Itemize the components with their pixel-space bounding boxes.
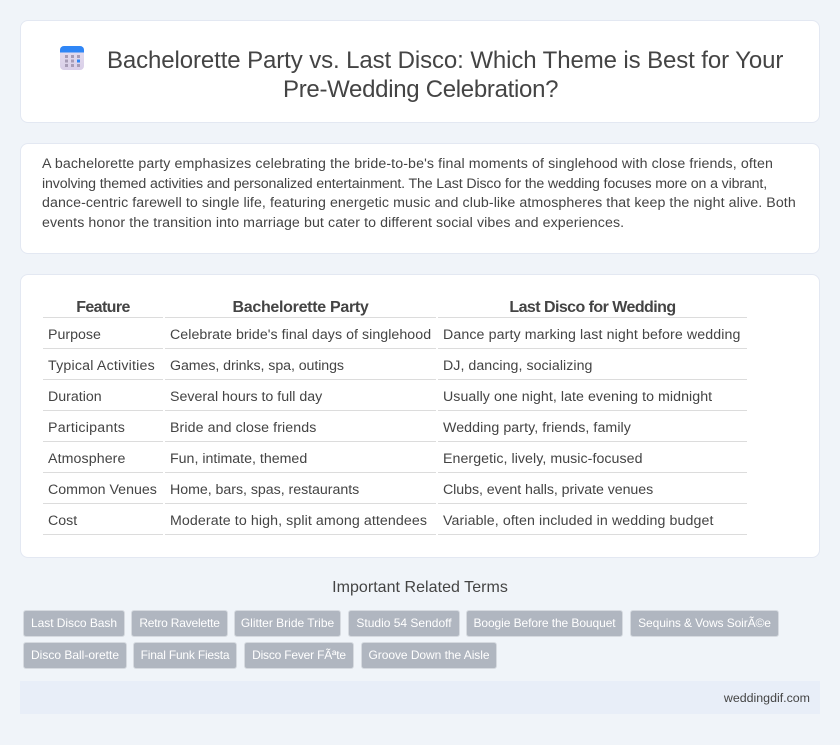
- tags: related terms: [23, 610, 779, 669]
- row: participants: Bride and close friends: [170, 420, 316, 436]
- row: purpose: Celebrate bride's final days of singlehood: [170, 327, 431, 343]
- row: duration: Several hours to full day: [170, 389, 322, 405]
- panel: introduction: [20, 143, 820, 254]
- tag: [23, 642, 127, 669]
- row: typical activities: [48, 358, 592, 374]
- row: atmosphere: Energetic, lively, music-focused: [443, 451, 643, 467]
- tag: Last Disco Bash: [31, 616, 117, 630]
- tag: [131, 610, 228, 637]
- table header: feature: Feature: [76, 299, 130, 316]
- row: common venues: [48, 482, 653, 498]
- text block: introduction: A bachelorette party emphasizes celebrating the bride-to-be's final moments of singlehood with close friends, often: [42, 156, 773, 172]
- text block: introduction: events honor the transition into marriage but cater to different social vibes and experiences.: [42, 215, 624, 231]
- tag: [244, 642, 354, 669]
- row: typical activities: Games, drinks, spa, outings: [170, 358, 344, 374]
- source credit: weddingdif.com: [724, 691, 810, 705]
- tag: [234, 610, 341, 637]
- text block: introduction: involving themed activities and personalized entertainment. The Last Disco for the wedding focuses more on a vibrant,: [42, 176, 767, 192]
- row: cost: Cost: [48, 513, 77, 529]
- tag: Glitter Bride Tribe: [241, 616, 334, 630]
- tag: [348, 610, 460, 637]
- title: Pre-Wedding Celebration?: [283, 76, 558, 103]
- row: duration: Usually one night, late evening to midnight: [443, 389, 712, 405]
- tag: Boogie Before the Bouquet: [473, 616, 616, 630]
- row: atmosphere: Atmosphere: [48, 451, 126, 467]
- row: purpose: Purpose: [48, 327, 101, 343]
- row: participants: [48, 420, 631, 436]
- tag: Studio 54 Sendoff: [356, 616, 452, 630]
- row: atmosphere: [48, 451, 643, 467]
- footer: [20, 681, 820, 714]
- row: purpose: [48, 327, 741, 343]
- row: cost: Moderate to high, split among attendees: [170, 513, 427, 529]
- table header: last disco for wedding: Last Disco for Wedding: [509, 299, 676, 316]
- heading: important related terms: Important Related Terms: [332, 579, 508, 596]
- title: [107, 47, 783, 103]
- row: typical activities: DJ, dancing, socializing: [443, 358, 592, 374]
- row: duration: [48, 389, 712, 405]
- row: participants: Participants: [48, 420, 125, 436]
- row: common venues: Common Venues: [48, 482, 157, 498]
- panel: comparison table card: [20, 274, 820, 558]
- tag: Sequins & Vows SoirÃ©e: [638, 616, 771, 630]
- tag: [361, 642, 497, 669]
- row: common venues: Home, bars, spas, restaurants: [170, 482, 359, 498]
- panel: title card: [20, 20, 820, 123]
- tag: Disco Fever FÃªte: [252, 648, 346, 662]
- tag: [630, 610, 779, 637]
- tag: [133, 642, 237, 669]
- row: cost: Variable, often included in wedding budget: [443, 513, 714, 529]
- tag: Final Funk Fiesta: [141, 648, 229, 662]
- tag: Disco Ball-orette: [31, 648, 119, 662]
- title: Bachelorette Party vs. Last Disco: Which Theme is Best for Your: [107, 47, 783, 74]
- tag: [23, 610, 125, 637]
- tag: Retro Ravelette: [139, 616, 220, 630]
- table header: bachelorette party: Bachelorette Party: [232, 299, 368, 316]
- row: common venues: Clubs, event halls, private venues: [443, 482, 653, 498]
- icon: calendar: [60, 46, 84, 70]
- row: purpose: Dance party marking last night before wedding: [443, 327, 741, 343]
- row: participants: Wedding party, friends, family: [443, 420, 631, 436]
- text block: introduction: [42, 156, 796, 231]
- row: typical activities: Typical Activities: [48, 358, 155, 374]
- tag: [466, 610, 623, 637]
- row: cost: [48, 513, 714, 529]
- text block: introduction: dance-centric farewell to single life, featuring energetic music and club-like atmospheres that keep the night alive. Both: [42, 195, 796, 211]
- tag: Groove Down the Aisle: [368, 648, 490, 662]
- row: atmosphere: Fun, intimate, themed: [170, 451, 307, 467]
- row: duration: Duration: [48, 389, 102, 405]
